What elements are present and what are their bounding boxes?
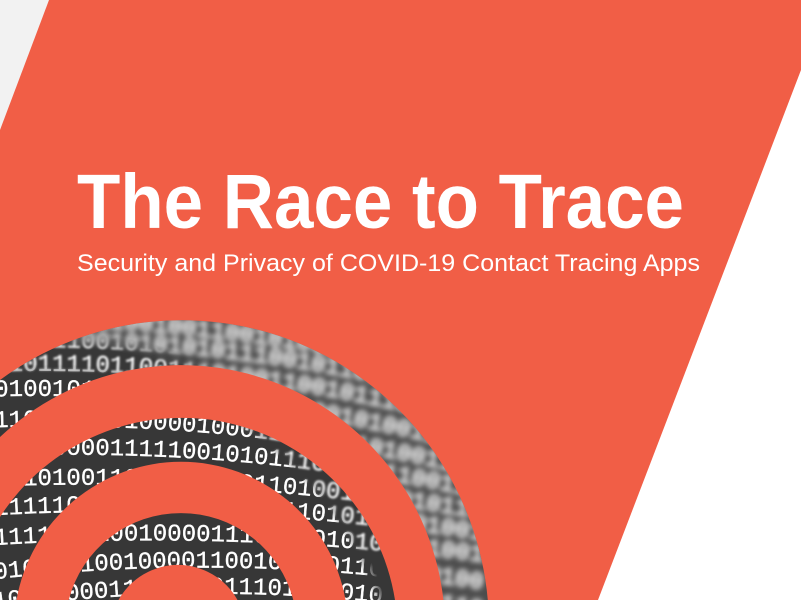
subtitle: Security and Privacy of COVID-19 Contact Tracing Apps <box>77 250 700 277</box>
title: The Race to Trace <box>77 159 684 245</box>
icon: orange signal rings <box>0 365 443 600</box>
binary code photo clipped to circle <box>0 320 488 600</box>
